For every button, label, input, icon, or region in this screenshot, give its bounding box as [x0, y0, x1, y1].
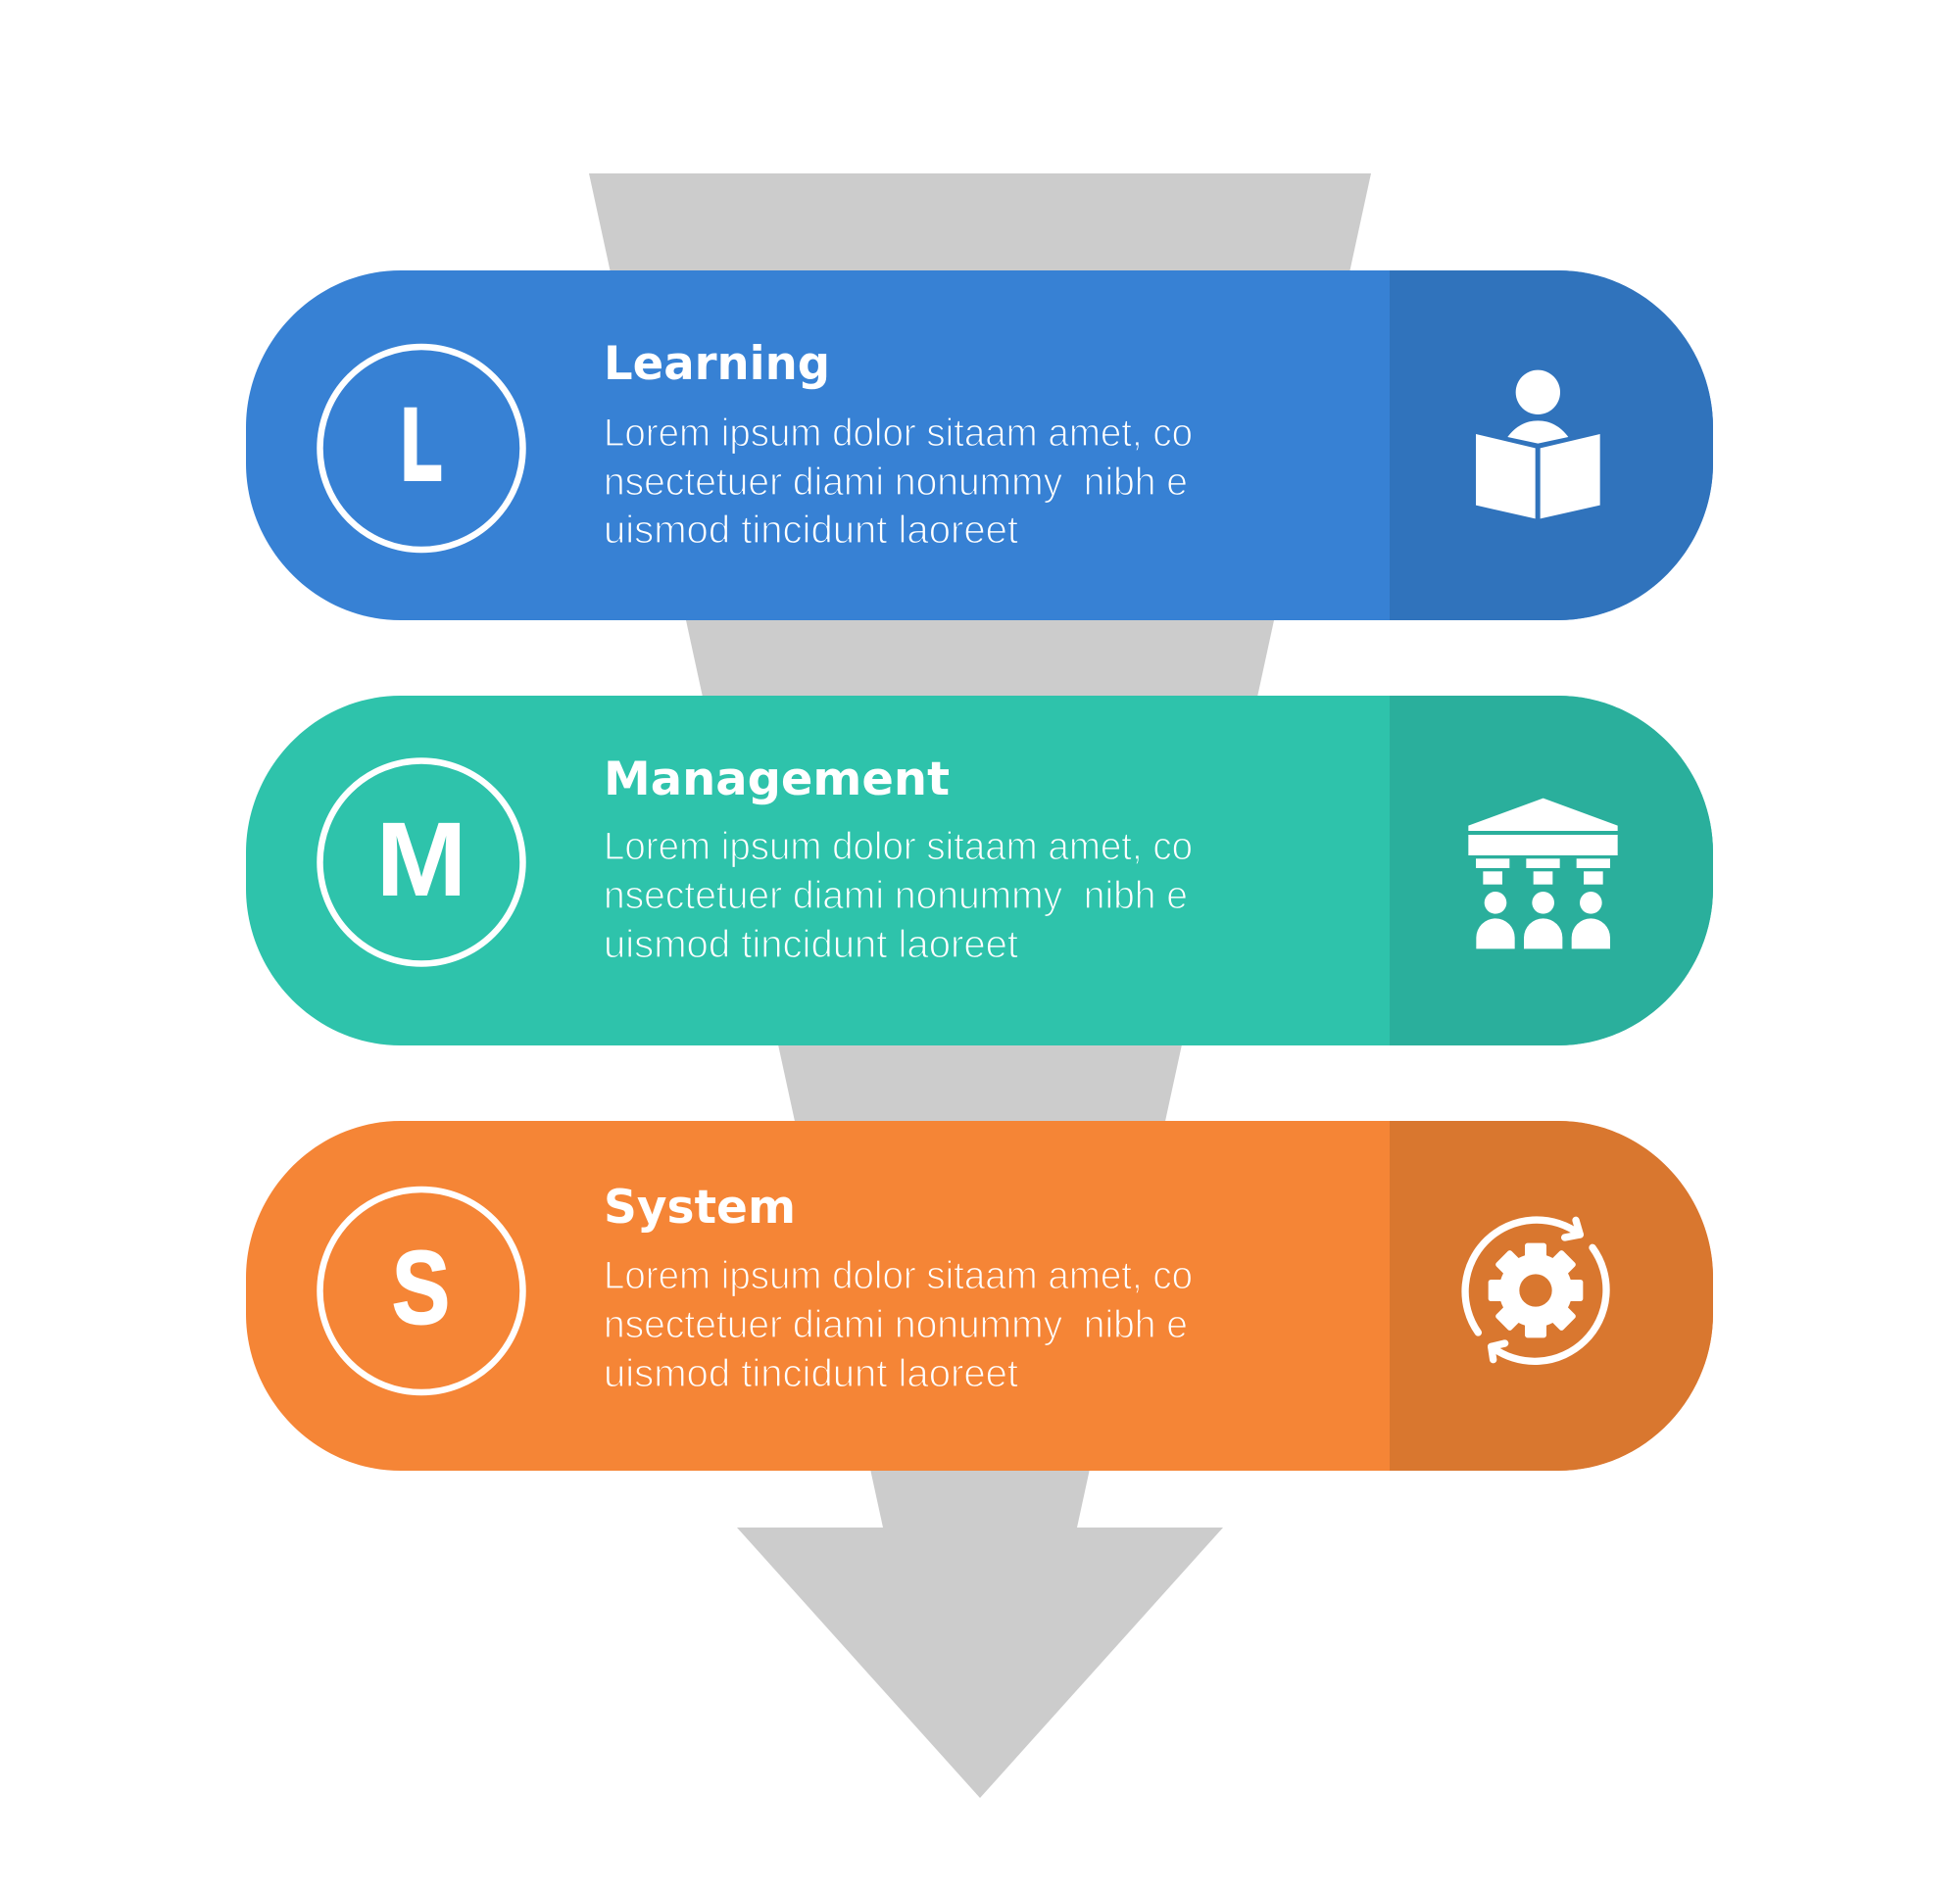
panel: System	[246, 1121, 1713, 1471]
heading: System: System	[604, 1181, 796, 1235]
letter badge L	[319, 347, 523, 550]
heading: Management: Management	[604, 752, 950, 806]
pill background	[246, 1121, 1713, 1471]
body text: Lorem ipsum dolor sitaam amet, co	[604, 1254, 1193, 1297]
pill background	[246, 696, 1713, 1045]
heading: Learning: Learning	[604, 337, 830, 391]
body text: Lorem ipsum dolor sitaam amet, co	[604, 412, 1193, 455]
body text: nsectetuer diami nonummy nibh e	[604, 874, 1188, 917]
pill background	[246, 270, 1713, 620]
letter badge M	[319, 760, 523, 964]
letter badge M: M	[376, 800, 466, 918]
darker icon section	[1390, 696, 1713, 1045]
body text: Lorem ipsum dolor sitaam amet, co	[604, 825, 1193, 868]
body text	[604, 412, 1193, 552]
panel: Management	[246, 696, 1713, 1045]
funnel arrow pointing down	[589, 173, 1371, 1798]
panel: Learning	[246, 270, 1713, 620]
icon: institution building with people	[1468, 799, 1618, 948]
letter badge S	[319, 1189, 523, 1392]
darker icon section	[1390, 1121, 1713, 1471]
body text: uismod tincidunt laoreet	[604, 1352, 1018, 1395]
body text: nsectetuer diami nonummy nibh e	[604, 1303, 1188, 1346]
icon: gear with circular arrows	[1465, 1220, 1606, 1361]
body text: nsectetuer diami nonummy nibh e	[604, 461, 1188, 504]
darker icon section	[1390, 270, 1713, 620]
body text: uismod tincidunt laoreet	[604, 509, 1018, 552]
letter badge S: S	[392, 1231, 450, 1346]
icon: person reading a book	[1476, 370, 1600, 518]
body text	[604, 825, 1193, 966]
body text	[604, 1254, 1193, 1395]
body text: uismod tincidunt laoreet	[604, 923, 1018, 966]
letter badge L: L	[402, 388, 442, 500]
